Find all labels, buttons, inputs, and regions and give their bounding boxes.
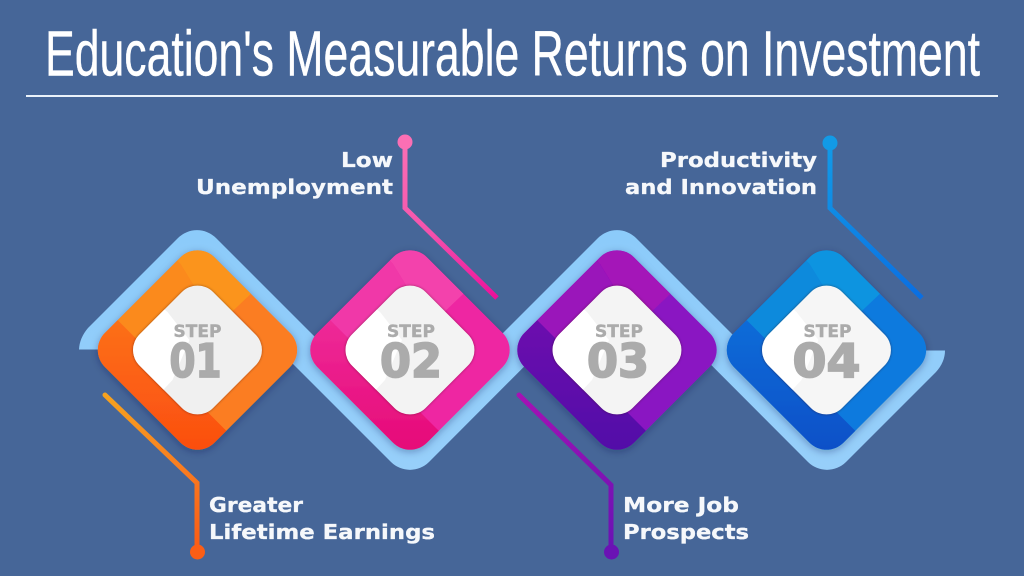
step 03 diamond: 03 [587, 334, 649, 388]
step 04 diamond: STEP [803, 322, 852, 341]
title underline [26, 95, 998, 97]
step 04 diamond: 04 [792, 334, 860, 388]
step 01 diamond: 01 [170, 334, 222, 388]
step 02 diamond [306, 250, 514, 456]
connector: low unemployment [398, 134, 497, 298]
step 02 diamond: STEP [387, 322, 435, 341]
label: low unemployment: Unemployment [196, 175, 393, 199]
label: more job prospects: More Job [623, 493, 739, 517]
label: more job prospects [623, 493, 749, 544]
label: greater lifetime earnings: Lifetime Earnings [209, 520, 435, 544]
label: low unemployment [196, 148, 393, 199]
connector: more job prospects [519, 395, 619, 560]
label: productivity and innovation: Productivity [660, 148, 817, 172]
label: productivity and innovation [625, 148, 817, 199]
step 03 diamond: STEP [595, 322, 643, 341]
step 02 diamond: 02 [380, 334, 442, 388]
connector: greater lifetime earnings [105, 395, 205, 560]
step 04 diamond [722, 250, 930, 456]
label: greater lifetime earnings [209, 493, 435, 544]
zigzag light blue ribbon [79, 230, 945, 470]
label: low unemployment: Low [341, 148, 393, 172]
label: greater lifetime earnings: Greater [209, 493, 304, 517]
label: more job prospects: Prospects [623, 520, 749, 544]
step 01 diamond: STEP [173, 322, 222, 341]
step 03 diamond [514, 248, 720, 454]
step 01 diamond [94, 248, 301, 454]
connector: productivity and innovation [822, 136, 922, 298]
label: productivity and innovation: and Innovation [625, 175, 817, 199]
